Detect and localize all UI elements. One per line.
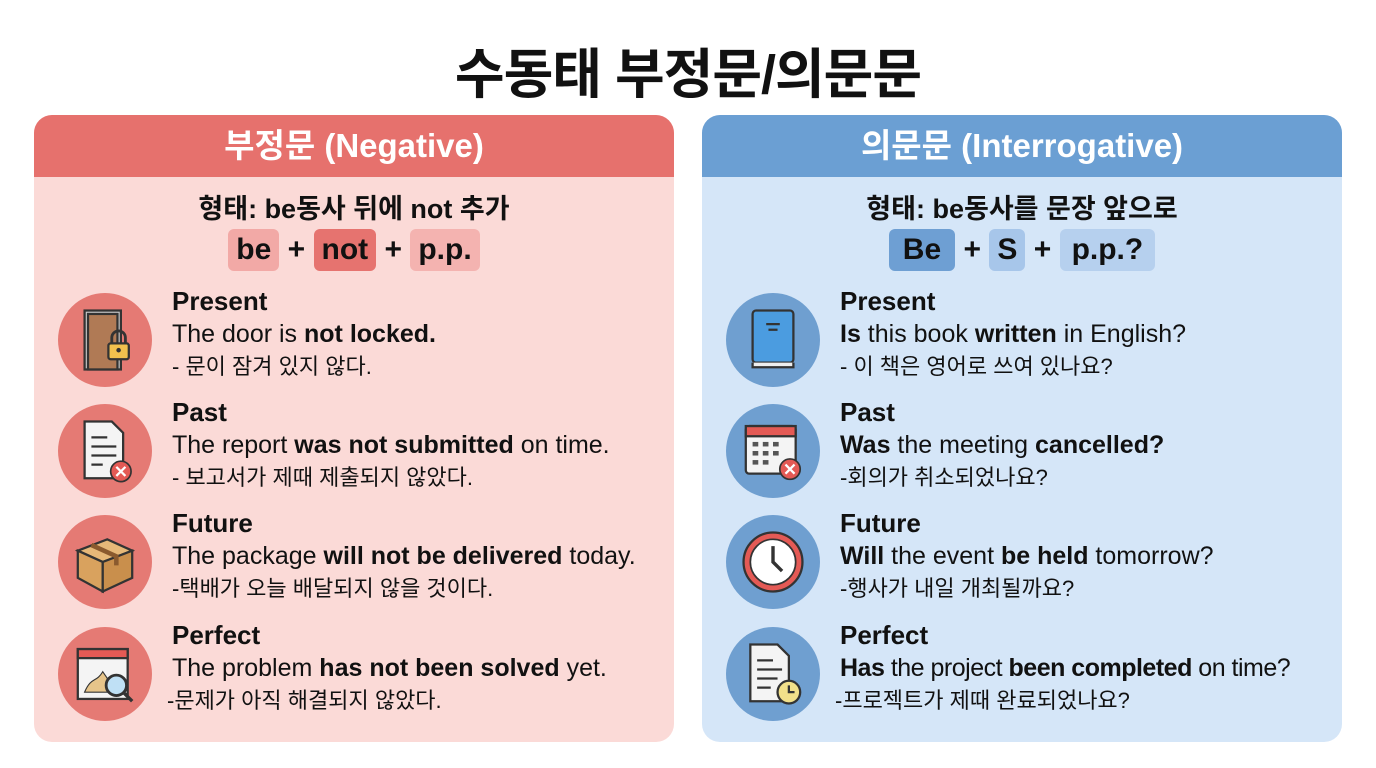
- text: present: - 문이 잠겨 있지 않다.: [172, 354, 372, 379]
- header: interrogative: [702, 115, 1342, 177]
- text: perfect: The problem has not been solved yet.: [172, 654, 607, 682]
- row: past: [726, 397, 1164, 498]
- text: perfect: Perfect: [840, 620, 928, 650]
- text: future: -행사가 내일 개최될까요?: [840, 576, 1074, 601]
- text: past: [840, 397, 1164, 490]
- text: present: [172, 286, 436, 379]
- text: perfect: Perfect: [172, 620, 260, 650]
- text: past: Past: [172, 397, 227, 427]
- text: future: Will the event be held tomorrow?: [840, 542, 1214, 570]
- panel: interrogative: [702, 115, 1342, 742]
- text: present: Present: [840, 286, 935, 316]
- icon: calendar with x: [726, 404, 820, 498]
- formula: Be + S + p.p.?: S: [997, 233, 1017, 266]
- text: present: [840, 286, 1186, 379]
- text: perfect: [167, 620, 607, 713]
- formula: be + not + p.p.: be: [236, 233, 271, 266]
- text: past: Past: [840, 397, 895, 427]
- text: perfect: Has the project been completed on time?: [840, 654, 1290, 682]
- text: past: Was the meeting cancelled?: [840, 431, 1164, 459]
- text: future: The package will not be delivered today.: [172, 542, 636, 570]
- text: perfect: -프로젝트가 제때 완료되었나요?: [835, 688, 1130, 713]
- header: negative: 부정문 (Negative): [224, 127, 484, 164]
- row: future: [58, 508, 636, 609]
- icon: book: [726, 293, 820, 387]
- text: past: -회의가 취소되었나요?: [840, 465, 1048, 490]
- row: perfect: [58, 620, 607, 721]
- row: present: [726, 286, 1186, 387]
- text: present: Is this book written in English?: [840, 320, 1186, 348]
- formula: be + not + p.p.: p.p.: [418, 233, 472, 266]
- text: present: - 이 책은 영어로 쓰여 있나요?: [840, 354, 1113, 379]
- formula: be + not + p.p.: [228, 229, 480, 271]
- text: past: The report was not submitted on time.: [172, 431, 610, 459]
- row: future: [726, 508, 1214, 609]
- form rule: interrogative: 형태: be동사를 문장 앞으로: [866, 194, 1178, 224]
- header: interrogative: 의문문 (Interrogative): [861, 127, 1183, 164]
- text: perfect: [835, 620, 1290, 713]
- icon: calendar with magnifier: [58, 627, 152, 721]
- title: 수동태 부정문/의문문: [455, 45, 921, 105]
- text: future: Future: [840, 508, 921, 538]
- formula: be + not + p.p.: + +: [288, 233, 402, 266]
- formula: Be + S + p.p.?: [889, 229, 1155, 271]
- row: present: [58, 286, 436, 387]
- icon: door with lock: [58, 293, 152, 387]
- icon: package: [58, 515, 152, 609]
- formula: Be + S + p.p.?: + +: [963, 233, 1051, 266]
- panel: negative: [34, 115, 674, 742]
- formula: Be + S + p.p.?: p.p.?: [1072, 233, 1143, 266]
- text: future: [840, 508, 1214, 601]
- icon: document with clock: [726, 627, 820, 721]
- form rule: negative: 형태: be동사 뒤에 not 추가: [198, 194, 510, 224]
- icon: clock: [726, 515, 820, 609]
- text: past: [172, 397, 610, 490]
- text: future: Future: [172, 508, 253, 538]
- row: perfect: [726, 620, 1290, 721]
- header: negative: [34, 115, 674, 177]
- text: perfect: -문제가 아직 해결되지 않았다.: [167, 688, 442, 713]
- text: future: [172, 508, 636, 601]
- text: future: -택배가 오늘 배달되지 않을 것이다.: [172, 576, 493, 601]
- text: present: The door is not locked.: [172, 320, 436, 348]
- text: past: - 보고서가 제때 제출되지 않았다.: [172, 465, 473, 490]
- row: past: [58, 397, 610, 498]
- formula: Be + S + p.p.?: Be: [903, 233, 941, 266]
- icon: report with x: [58, 404, 152, 498]
- text: present: Present: [172, 286, 267, 316]
- formula: be + not + p.p.: not: [322, 233, 368, 266]
